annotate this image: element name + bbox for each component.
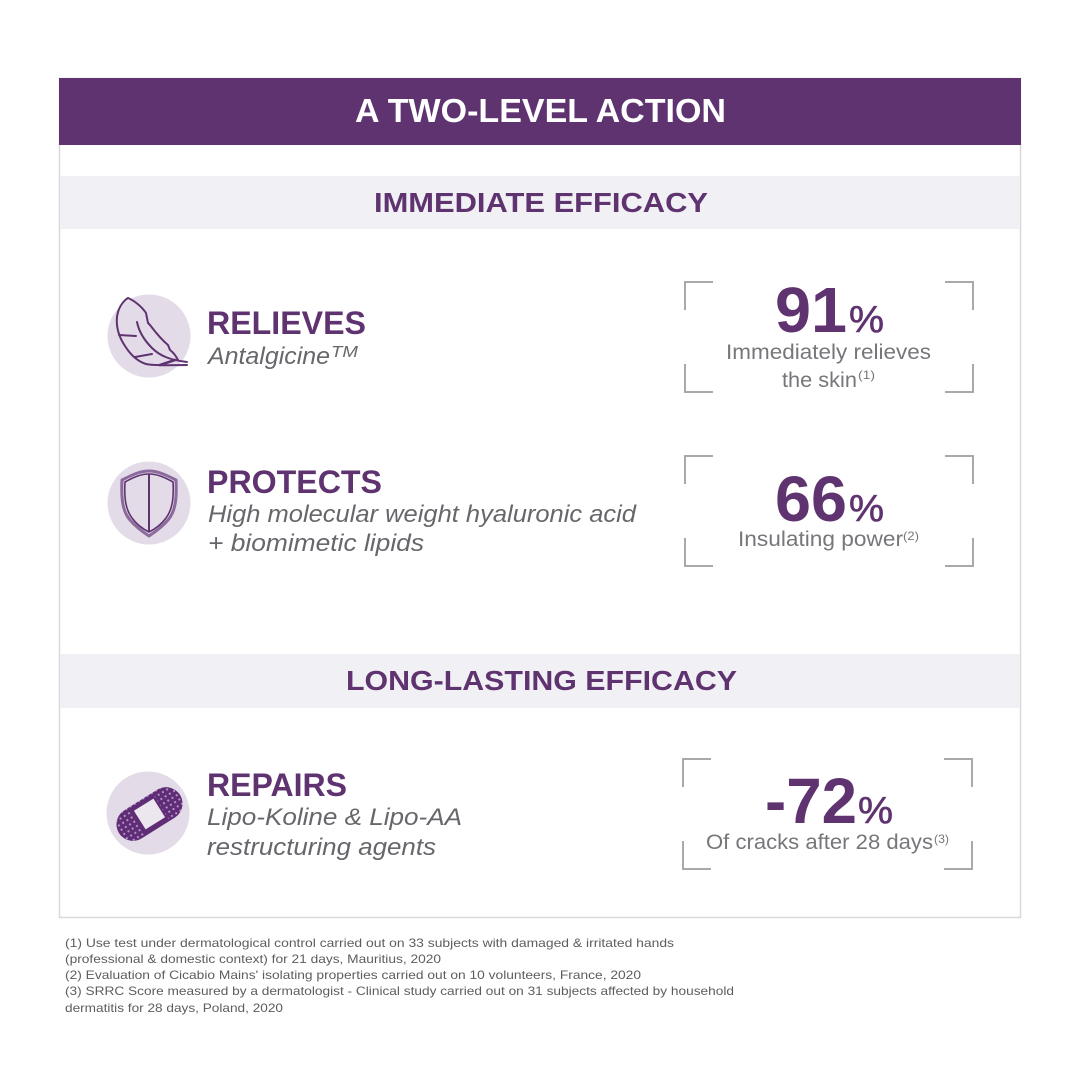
- stat: 91%: 91: [775, 274, 847, 346]
- title banner: [59, 78, 1021, 145]
- row: relieves: [108, 294, 366, 378]
- section heading: immediate efficacy: [60, 176, 1020, 229]
- footnotes: (1) Use test under dermatological control carried out on 33 subjects with damaged & irritated hands: [65, 936, 674, 950]
- stat: -72%: Of cracks after 28 days: [706, 831, 933, 854]
- footnotes: (3) SRRC Score measured by a dermatologist - Clinical study carried out on 31 subjects affected by household: [65, 984, 734, 998]
- text: relieves: RELIEVES: [207, 305, 366, 341]
- corner brackets: [685, 456, 973, 566]
- section heading: long-lasting efficacy: [60, 654, 1020, 708]
- stat: 91%: the skin: [782, 369, 857, 392]
- row: protects: [108, 462, 637, 557]
- stat: 91%: Immediately relieves: [726, 341, 931, 364]
- text: relieves: Antalgicine: [206, 343, 330, 370]
- stat: 66%: [685, 456, 973, 566]
- stat: -72%: %: [858, 790, 893, 832]
- stat: 66%: %: [849, 488, 884, 530]
- corner brackets: [683, 759, 972, 869]
- text: protects: High molecular weight hyaluronic acid: [208, 501, 637, 528]
- stat: 66%: (2): [903, 529, 919, 543]
- text: repairs: REPAIRS: [207, 767, 347, 803]
- text: repairs: Lipo-Koline & Lipo-AA: [207, 804, 462, 831]
- stat: 91%: [685, 274, 973, 392]
- footnotes: (2) Evaluation of Cicabio Mains' isolating properties carried out on 10 volunteers, France, 2020: [65, 968, 641, 982]
- footnotes: (professional & domestic context) for 21 days, Mauritius, 2020: [65, 952, 441, 966]
- text: relieves: TM: [331, 344, 359, 361]
- text: relieves: [206, 305, 366, 370]
- title banner: A TWO-LEVEL ACTION: [355, 92, 726, 129]
- corner brackets: [685, 282, 973, 392]
- stat: -72%: (3): [934, 832, 949, 846]
- text: protects: PROTECTS: [207, 464, 382, 500]
- text: repairs: restructuring agents: [207, 834, 436, 861]
- text: repairs: [207, 767, 462, 861]
- icon: bandage: [106, 772, 190, 854]
- footnotes: dermatitis for 28 days, Poland, 2020: [65, 1001, 283, 1015]
- section heading: immediate efficacy: IMMEDIATE EFFICACY: [374, 187, 708, 218]
- icon: shield: [108, 462, 190, 544]
- stat: 66%: Insulating power: [738, 528, 903, 551]
- text: protects: + biomimetic lipids: [208, 530, 424, 557]
- main panel frame: [60, 78, 1020, 918]
- text: protects: [207, 464, 637, 557]
- stat: 91%: (1): [858, 368, 875, 382]
- stat: 91%: %: [849, 299, 884, 341]
- stat: -72%: -72: [765, 765, 857, 837]
- section heading: long-lasting efficacy: LONG-LASTING EFFICACY: [346, 665, 737, 696]
- icon: feather: [108, 294, 190, 378]
- footnotes: [65, 936, 734, 1015]
- row: repairs: [106, 767, 462, 861]
- stat: -72%: [683, 759, 972, 869]
- stat: 66%: 66: [775, 463, 847, 535]
